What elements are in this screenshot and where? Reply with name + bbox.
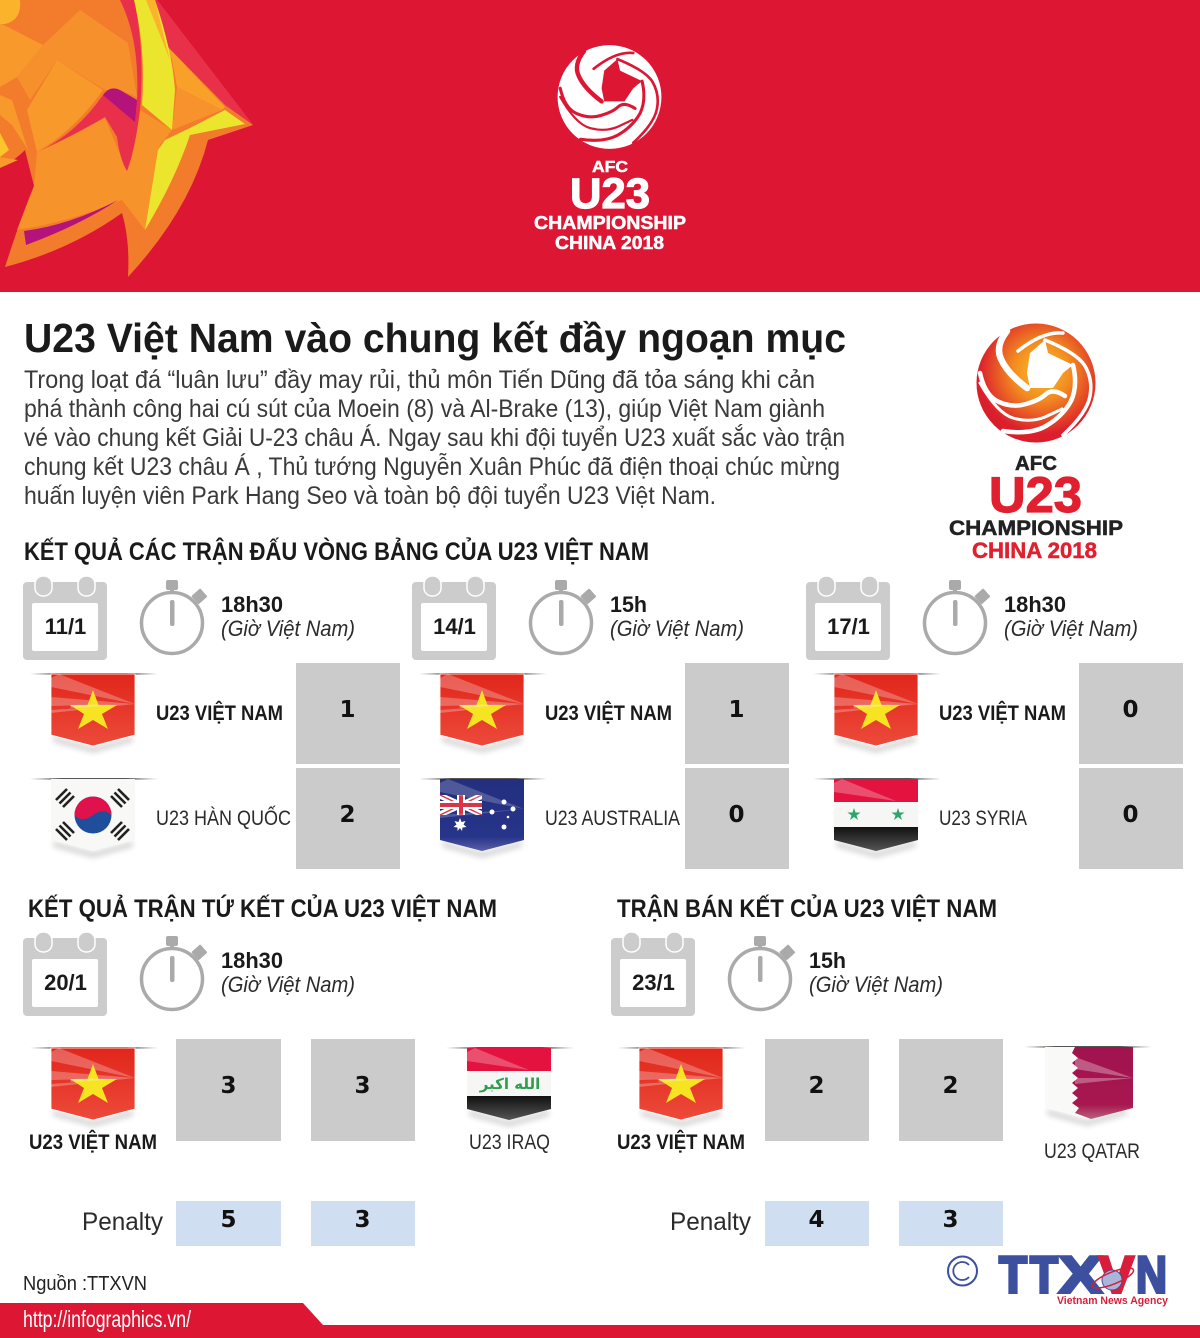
white AFC logo	[534, 45, 686, 253]
TTXVN logo	[999, 1246, 1169, 1307]
intro text block	[24, 366, 845, 510]
panel: quarter final: 3	[220, 1073, 237, 1099]
colour AFC logo: CHAMPIONSHIP	[949, 517, 1123, 540]
panel: match 17/1: 0	[1122, 697, 1139, 723]
panel: quarter final: U23 IRAQ	[469, 1131, 550, 1154]
panel: semi final: Penalty	[670, 1208, 751, 1236]
TTXVN logo: T	[1030, 1246, 1058, 1304]
panel: match 17/1: U23 SYRIA	[939, 807, 1027, 830]
white AFC logo: CHINA 2018	[555, 233, 664, 253]
colour ball	[976, 324, 1096, 442]
panel: quarter final: 3	[354, 1073, 371, 1099]
panel: match 14/1	[412, 576, 789, 869]
intro text block: Trong loạt đá “luân lưu” đầy may rủi, thủ môn Tiến Dũng đã tỏa sáng khi cản	[24, 366, 815, 394]
panel: quarter final: Penalty	[82, 1208, 163, 1236]
panel: match 14/1: U23 VIỆT NAM	[545, 701, 672, 725]
panel: semi final	[611, 932, 1152, 1246]
panel: match 14/1: U23 AUSTRALIA	[545, 807, 680, 830]
heading: semi final: TRẬN BÁN KẾT CỦA U23 VIỆT NAM	[617, 893, 997, 923]
panel: semi final: 15h	[809, 948, 846, 973]
TTXVN logo: N	[1136, 1246, 1167, 1304]
panel: semi final: 4	[808, 1207, 825, 1233]
TTXVN logo: X	[1059, 1246, 1102, 1304]
panel: match 11/1	[23, 576, 400, 869]
flag: Iraq: الله اكبر	[479, 1075, 540, 1093]
panel: quarter final: 3	[354, 1207, 371, 1233]
footer bar: http://infographics.vn/	[23, 1306, 191, 1332]
flag: Syria	[813, 778, 941, 858]
panel: semi final: U23 VIỆT NAM	[617, 1130, 745, 1154]
heading: group stage: KẾT QUẢ CÁC TRẬN ĐẤU VÒNG BẢNG CỦA U23 VIỆT NAM	[24, 536, 649, 566]
panel: quarter final: 18h30	[221, 948, 283, 973]
intro text block: vé vào chung kết Giải U-23 châu Á. Ngay sau khi đội tuyển U23 xuất sắc vào trận	[24, 423, 845, 452]
panel: match 17/1: 18h30	[1004, 592, 1066, 617]
panel: semi final: 3	[942, 1207, 959, 1233]
panel: semi final: 23/1	[632, 970, 675, 995]
panel: match 17/1	[806, 576, 1183, 869]
panel: match 11/1: 1	[339, 697, 356, 723]
colour AFC logo	[949, 324, 1123, 563]
colour AFC logo: U23	[989, 467, 1082, 523]
panel: semi final: 2	[808, 1073, 825, 1099]
panel: quarter final: (Giờ Việt Nam)	[221, 972, 355, 997]
flag: Australia	[419, 778, 547, 858]
copyright icon	[948, 1256, 977, 1286]
source note: Nguồn :TTXVN	[23, 1273, 147, 1295]
intro text block: huấn luyện viên Park Hang Seo và toàn bộ đội tuyển U23 Việt Nam.	[24, 482, 716, 510]
TTXVN logo: T	[999, 1246, 1027, 1304]
title: U23 Việt Nam vào chung kết đầy ngoạn mục	[24, 315, 846, 361]
TTXVN logo: V	[1099, 1246, 1134, 1304]
panel: match 11/1: 2	[339, 802, 356, 828]
white AFC logo: AFC	[592, 159, 628, 176]
panel: match 17/1: (Giờ Việt Nam)	[1004, 616, 1138, 641]
flag: Iraq	[446, 1047, 574, 1127]
white AFC logo: U23	[570, 170, 650, 218]
panel: match 11/1: (Giờ Việt Nam)	[221, 616, 355, 641]
panel: quarter final: U23 VIỆT NAM	[29, 1130, 157, 1154]
flag: South Korea	[30, 778, 158, 858]
colour AFC logo: AFC	[1015, 453, 1057, 475]
panel: quarter final: 20/1	[44, 970, 87, 995]
panel: quarter final: 5	[220, 1207, 237, 1233]
panel: quarter final	[23, 932, 574, 1246]
panel: match 14/1: 1	[728, 697, 745, 723]
panel: semi final: 2	[942, 1073, 959, 1099]
panel: match 14/1: (Giờ Việt Nam)	[610, 616, 744, 641]
white ball	[558, 45, 661, 149]
panel: match 17/1: 0	[1122, 802, 1139, 828]
panel: match 17/1: U23 VIỆT NAM	[939, 701, 1066, 725]
TTXVN logo: Vietnam News Agency	[1057, 1295, 1169, 1307]
footer bar	[0, 1303, 1200, 1338]
panel: match 11/1: 11/1	[45, 614, 86, 639]
heading: quarter final: KẾT QUẢ TRẬN TỨ KẾT CỦA U23 VIỆT NAM	[28, 893, 497, 923]
flag: Qatar	[1024, 1046, 1152, 1126]
panel: match 14/1: 15h	[610, 592, 647, 617]
colour AFC logo: CHINA 2018	[972, 538, 1097, 563]
panel: match 17/1: 17/1	[827, 614, 870, 639]
panel: match 11/1: U23 VIỆT NAM	[156, 701, 283, 725]
white AFC logo: CHAMPIONSHIP	[534, 213, 686, 233]
intro text block: chung kết U23 châu Á , Thủ tướng Nguyễn Xuân Phúc đã điện thoại chúc mừng	[24, 452, 840, 481]
panel: match 14/1: 0	[728, 802, 745, 828]
panel: semi final: U23 QATAR	[1044, 1140, 1140, 1163]
panel: semi final: (Giờ Việt Nam)	[809, 972, 943, 997]
intro text block: phá thành công hai cú sút của Moein (8) và Al-Brake (13), giúp Việt Nam giành	[24, 395, 825, 423]
panel: match 11/1: 18h30	[221, 592, 283, 617]
panel: match 11/1: U23 HÀN QUỐC	[156, 806, 291, 830]
panel: match 14/1: 14/1	[433, 614, 476, 639]
star artwork	[0, 0, 253, 277]
